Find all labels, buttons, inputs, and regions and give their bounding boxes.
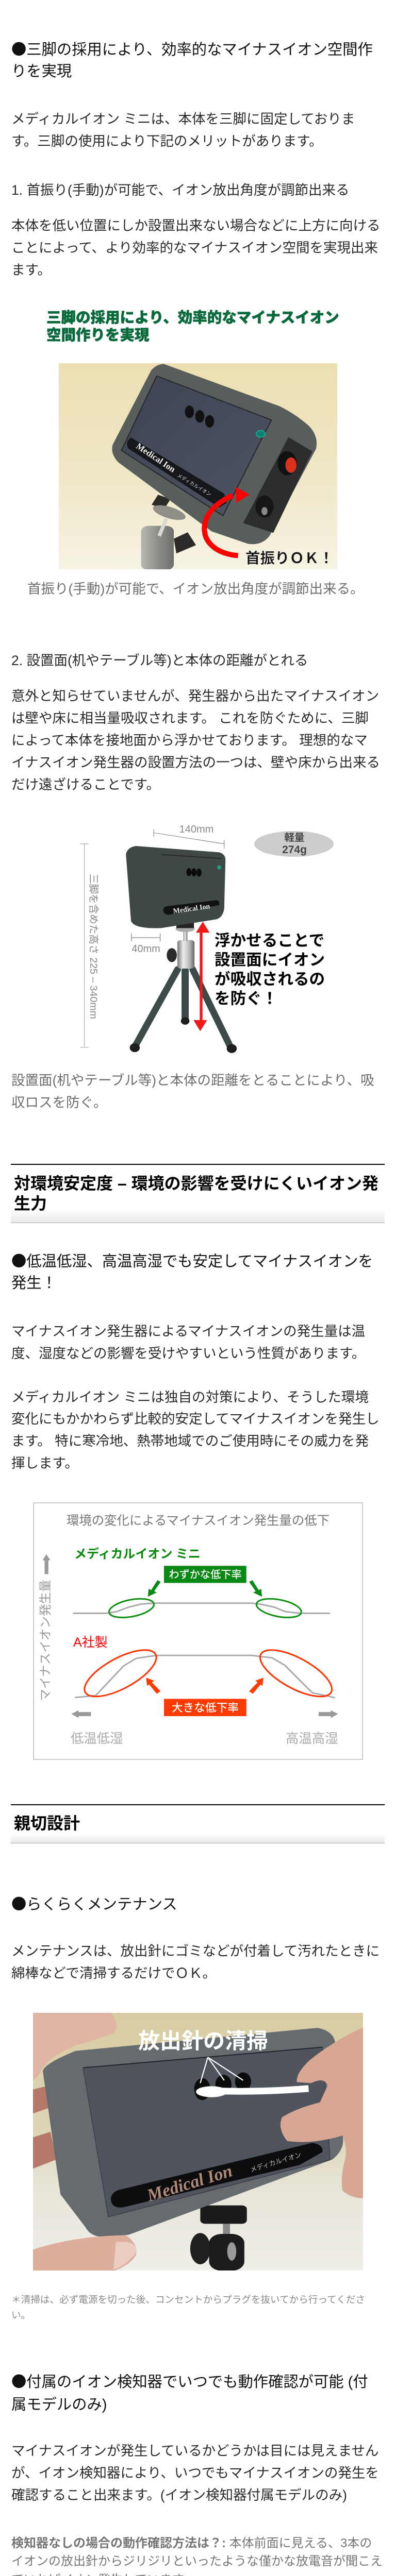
section header: user-friendly design: 親切設計 — [14, 1814, 80, 1833]
y-axis label: マイナスイオン発生量 — [39, 1580, 53, 1701]
tripod head — [167, 923, 195, 969]
callout: floating prevents ion absorption: が吸収されるの — [215, 970, 325, 988]
curve: Medical Ion mini — [73, 1603, 330, 1613]
note: unplug before cleaning: ＊清掃は、必ず電源を切った後、コンセントからプラグを抜いてから行ってくださ — [11, 2292, 365, 2306]
red power button — [277, 451, 297, 475]
device side panel — [243, 437, 312, 533]
device face panel — [121, 376, 272, 516]
text: Medical Ion stability: メディカルイオン ミニは独自の対策により、そうした環境 — [11, 1389, 369, 1404]
height label vertical: 三脚を含めた高さ 225 – 340mm — [88, 874, 99, 1019]
top recess shadow — [83, 2047, 322, 2068]
curve: company A — [75, 1655, 335, 1698]
text: ion detector description: マイナスイオンが発生しているかどうかは目には見えません — [11, 2443, 378, 2459]
heading: ion detector: ●付属のイオン検知器でいつでも動作確認が可能 (付 — [11, 2370, 368, 2392]
device top edge — [161, 855, 222, 858]
note: unplug before cleaning — [11, 2292, 365, 2320]
name plate — [163, 900, 219, 915]
left hand rear fingers — [33, 2086, 57, 2168]
device body — [112, 364, 317, 544]
height dimension line — [80, 844, 89, 1047]
heading: stable generation: 発生！ — [11, 1275, 57, 1292]
40mm dimension — [131, 934, 160, 941]
text: ion detector description — [11, 2443, 379, 2503]
section header: environmental stability: 生力 — [14, 1194, 47, 1213]
red rotation arrow — [204, 487, 250, 556]
chart frame — [34, 1503, 363, 1759]
tripod legs — [135, 970, 232, 1049]
text: Medical Ion stability: 揮します。 — [11, 1455, 78, 1471]
weight badge: 274g — [282, 844, 307, 856]
text: ion generation and humidity: 度、湿度などの影響を受けやすいという性質があります。 — [11, 1346, 365, 1361]
ion holes — [186, 868, 202, 876]
text: ion detector description: 確認すること出来ます。(イオン検知器付属モデルのみ) — [11, 2487, 347, 2503]
chart: ion output vs environment — [33, 1502, 363, 1760]
callout: floating prevents ion absorption: を防ぐ！ — [215, 990, 277, 1008]
series label: Medical Ion mini: メディカルイオン ミニ — [74, 1547, 201, 1561]
text: ion generation and humidity — [11, 1324, 365, 1361]
name plate — [111, 2143, 323, 2208]
device face panel — [83, 2047, 330, 2217]
label: 140mm: 140mm — [179, 824, 213, 835]
text: maintenance description: 綿棒などで清掃するだけでＯＫ。 — [11, 1965, 216, 1981]
ion holes — [194, 2072, 251, 2100]
x-axis left arrow — [71, 1710, 91, 1718]
nail — [113, 2242, 137, 2270]
green highlight ellipses — [106, 1595, 304, 1621]
stand knob and ball head — [190, 2206, 247, 2270]
section header: environmental stability — [11, 1164, 385, 1223]
device body — [126, 846, 225, 928]
name plate katakana: メディカルイオン — [176, 472, 212, 498]
tripod ball mount — [141, 495, 196, 570]
caption: distance from surface: 収ロスを防ぐ。 — [11, 1094, 107, 1110]
photo: device tilted on tripod — [59, 363, 337, 569]
note: unplug before cleaning: い。 — [11, 2310, 30, 2320]
device frame — [43, 2028, 343, 2237]
chart title: 環境の変化によるマイナスイオン発生量の低下 — [67, 1514, 330, 1528]
text: point 2 description: 意外と知らせていませんが、発生器から出たマイナスイオン — [11, 688, 379, 704]
subheading: point 2: 2. 設置面(机やテーブル等)と本体の距離がとれる — [11, 653, 308, 668]
right hand — [281, 2027, 364, 2198]
text: Medical Ion stability: 変化にもかかわらず比較的安定してマイナスイオンを発生し — [11, 1411, 380, 1427]
name plate text: Medical Ion — [173, 903, 210, 916]
caption: neck swing: 首振り(手動)が可能で、イオン放出角度が調節出来る。 — [27, 581, 364, 597]
red highlight ellipses — [74, 1642, 342, 1704]
ion holes — [185, 405, 214, 428]
red arrows — [146, 1677, 264, 1693]
section header: environmental stability: 対環境安定度 – 環境の影響を受けにくいイオン発 — [14, 1174, 378, 1193]
power connector — [255, 496, 274, 518]
text: tripod intro: す。三脚の使用により下記のメリットがあります。 — [11, 133, 323, 149]
text: point 1 description: ことによって、より効率的なマイナスイオン空間を実現出来 — [11, 240, 378, 256]
text: ion detector description: が、イオン検知器により、いつでもマイナスイオンの発生を — [11, 2465, 379, 2481]
left thumb bottom — [33, 2235, 137, 2272]
red double arrow — [193, 922, 209, 1031]
text: maintenance description — [11, 1943, 380, 1981]
pointer lines — [200, 2057, 243, 2083]
green LED — [217, 865, 221, 870]
text: tripod intro — [11, 111, 355, 149]
green arrows — [148, 1580, 262, 1597]
text: point 2 description: は壁や床に相当量吸収されます。 これを防ぐために、三脚 — [11, 710, 369, 726]
photo: cleaning needles with cotton swab — [33, 2013, 363, 2270]
tripod feet — [130, 1018, 237, 1053]
name plate text: Medical Ion — [135, 441, 177, 474]
text: point 2 description — [11, 688, 380, 792]
heading: stable generation: ●低温低湿、高温高湿でも安定してマイナスイオンを — [11, 1249, 373, 1271]
text: point 1 description: 本体を低い位置にしか設置出来ない場合などに上方に向ける — [11, 218, 381, 233]
heading: tripod benefit — [11, 38, 373, 80]
text: checking without detector: イオンの放出針からジリジリといったような僅かな放電音が聞こえ — [11, 2554, 383, 2568]
width dimension line — [154, 829, 224, 849]
weight badge: 軽量 — [284, 832, 305, 843]
callout: neck swing OK: 首振りＯＫ！ — [245, 550, 334, 567]
red label box — [164, 1699, 246, 1716]
heading: tripod benefit: ●三脚の採用により、効率的なマイナスイオン空間作 — [11, 38, 373, 59]
section header: user-friendly design — [11, 1804, 385, 1843]
image title: 放出針の清掃 — [138, 2029, 268, 2053]
text: maintenance description: メンテナンスは、放出針にゴミなどが付着して汚れたときに — [11, 1943, 380, 1959]
heading: easy maintenance: ●らくらくメンテナンス — [11, 1892, 177, 1914]
heading: ion detector: 属モデルのみ) — [11, 2396, 107, 2413]
text: point 2 description: だけ遠ざけることです。 — [11, 777, 160, 792]
caption: distance from surface: 設置面(机やテーブル等)と本体の距離をとることにより、吸 — [11, 1073, 374, 1088]
heading: stable generation — [11, 1249, 373, 1292]
image heading: green tripod title: 空間作りを実現 — [46, 327, 150, 344]
text: point 1 description — [11, 218, 381, 278]
x-axis label: low: 低温低湿 — [71, 1732, 123, 1746]
left thumb top — [33, 2012, 117, 2080]
text: ion generation and humidity: マイナスイオン発生器によるマイナスイオンの発生量は温 — [11, 1324, 365, 1339]
text: Medical Ion stability: ます。 特に寒冷地、熱帯地域でのご使用時にその威力を発 — [11, 1433, 369, 1449]
callout: floating prevents ion absorption: 浮かせることで — [215, 932, 324, 950]
x-axis right arrow — [319, 1710, 338, 1718]
figure: device height on tripod — [80, 824, 334, 1053]
text: Medical Ion stability — [11, 1389, 380, 1471]
red box label: 大きな低下率 — [172, 1701, 239, 1714]
subheading: point 1: 1. 首振り(手動)が可能で、イオン放出角度が調節出来る — [11, 182, 350, 198]
text: tripod intro: メディカルイオン ミニは、本体を三脚に固定しておりま — [11, 111, 355, 127]
image heading: green tripod title — [46, 310, 339, 344]
name plate — [127, 437, 227, 507]
name plate katakana: メディカルイオン — [249, 2150, 302, 2174]
green box label: わずかな低下率 — [169, 1569, 242, 1581]
text: checking without detector — [11, 2536, 383, 2576]
heading: ion detector — [11, 2370, 368, 2413]
text: checking without detector: 検知器なしの場合の動作確認方法は？: 本体前面に見える、3本の — [11, 2536, 372, 2550]
green LED — [256, 431, 265, 437]
y-axis arrow — [43, 1554, 51, 1574]
series label: company A: A社製 — [73, 1635, 108, 1650]
text: point 2 description: によって本体を接地面から浮かせております。 理想的なマ — [11, 733, 368, 748]
text: point 2 description: イナスイオン発生器の設置方法の一つは、壁や床から出来る — [11, 755, 380, 770]
heading: tripod benefit: りを実現 — [11, 63, 72, 80]
x-axis label: high: 高温高湿 — [286, 1732, 338, 1746]
weight badge — [254, 831, 334, 857]
caption: distance from surface — [11, 1073, 374, 1110]
text: point 1 description: ます。 — [11, 262, 51, 278]
callout: floating prevents ion absorption: 設置面にイオン — [215, 951, 325, 969]
green label box — [164, 1566, 246, 1583]
cotton swab — [196, 2086, 308, 2097]
image heading: green tripod title: 三脚の採用により、効率的なマイナスイオン — [46, 310, 339, 326]
name plate text: Medical Ion — [144, 2161, 235, 2206]
label: 40mm: 40mm — [131, 943, 160, 955]
